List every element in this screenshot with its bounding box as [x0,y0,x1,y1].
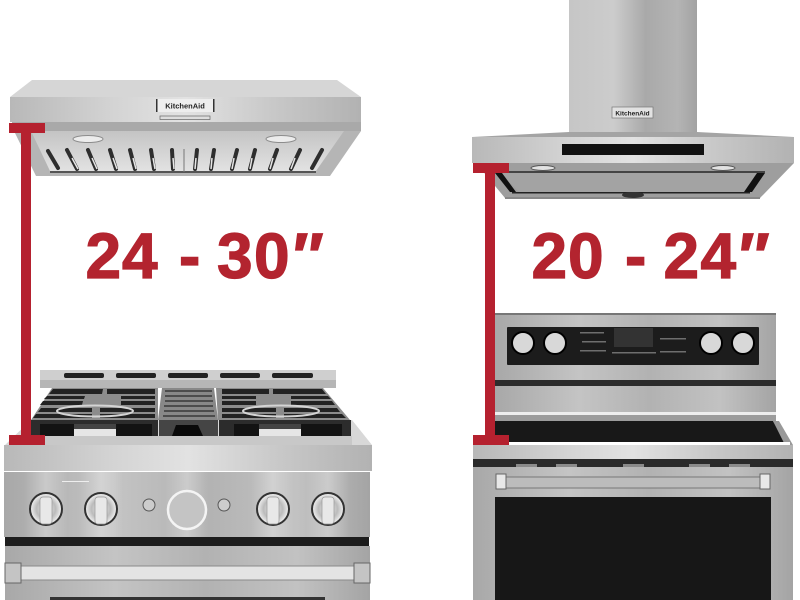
hood logo: KitchenAid [165,102,205,110]
vent strip [5,537,369,546]
hood lights [531,166,735,170]
chimney logo: KitchenAid [615,110,650,118]
left height bracket [9,123,45,445]
knobs [30,491,344,529]
control panel [507,327,759,365]
right measurement label: 20 - 24″ [532,220,770,292]
dark trim [495,380,776,386]
cooktop surface [5,420,372,445]
right chimney hood [472,0,794,199]
front lip [4,445,372,471]
right electric range [473,313,793,600]
backguard [40,370,336,388]
cooktop [485,421,785,442]
door handle [496,474,770,489]
chimney [569,0,697,133]
left gas range [4,370,372,600]
oven window [495,497,771,600]
backguard [495,313,776,415]
right height bracket [473,163,509,445]
hood logo [156,99,214,112]
left wall hood [10,80,361,176]
oven door [473,467,793,600]
grates [31,388,351,436]
oven door [5,546,370,600]
control panel [4,472,370,537]
left measurement label: 24 - 30″ [86,220,324,292]
baffle slots [48,150,322,169]
vent strip [473,459,793,467]
touch control panel [562,144,704,155]
front lip [473,445,793,459]
door handle [5,563,370,583]
hood lights [73,136,296,142]
chimney logo [612,107,653,118]
